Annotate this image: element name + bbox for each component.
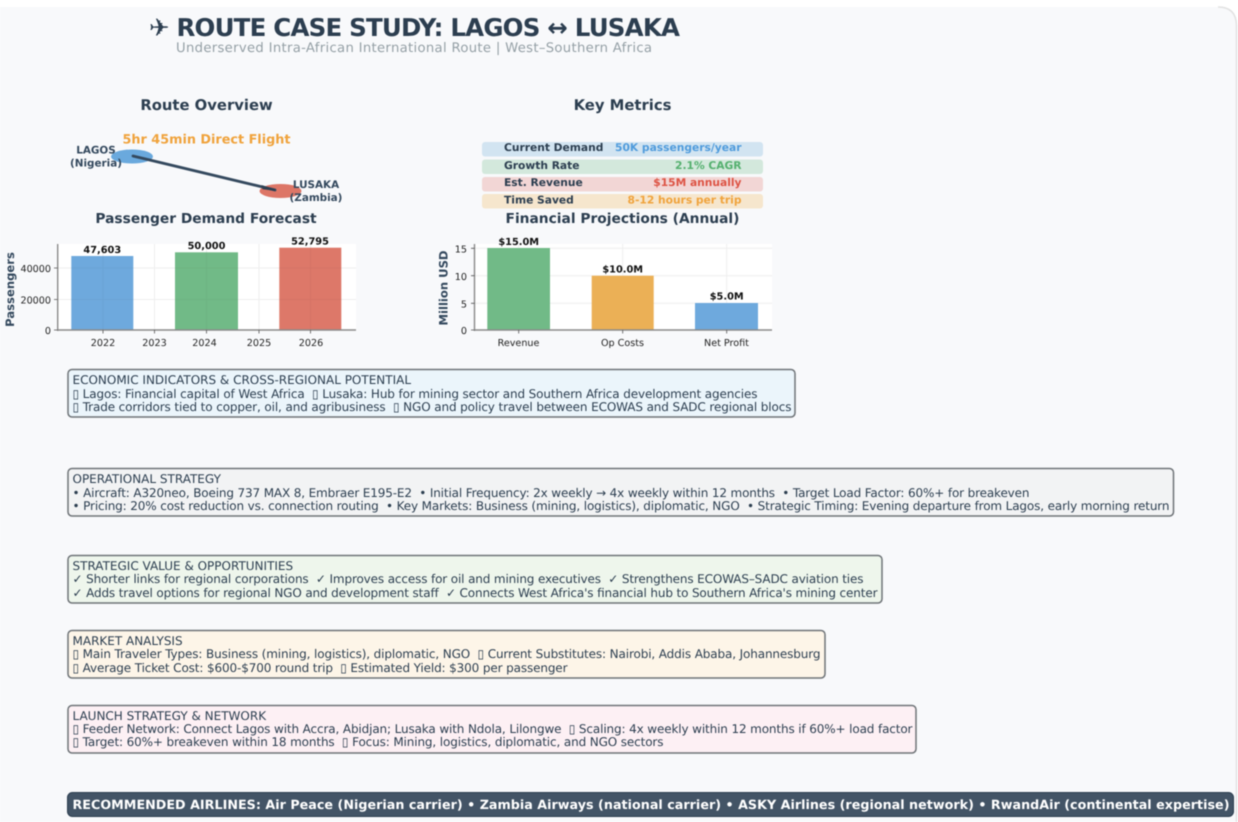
heading: passenger demand forecast: Passenger Demand Forecast (95, 211, 317, 227)
metric: time saved (482, 194, 763, 208)
axis tick labels: Net Profit (704, 338, 749, 349)
bar chart: financial projections: 5 (461, 300, 467, 310)
y axis label: Passengers (3, 252, 17, 327)
panel: operational strategy: • Pricing: 20% cost reduction vs. connection routing • Key Markets: Business (mining, logistics), diplomatic, NGO • Strategic Timing: Evening departure from Lagos, early morning return (72, 499, 1170, 513)
axis tick labels: 2023 (142, 338, 167, 349)
panel: economic indicators: ▯ Lagos: Financial capital of West Africa ▯ Lusaka: Hub for mining sector and Southern Africa development agencies (72, 387, 758, 401)
bar value labels: 47,603 (83, 245, 121, 256)
metric: current demand: Current Demand (504, 141, 603, 154)
Lusaka label: (Zambia) (290, 192, 342, 204)
heading: route overview: Route Overview (140, 97, 273, 114)
bar chart: financial projections: $10.0M (602, 264, 643, 276)
panel: operational strategy: • Aircraft: A320neo, Boeing 737 MAX 8, Embraer E195-E2 • Initial Frequency: 2x weekly → 4x weekly within 12 months • Target Load Factor: 60%+ for breakeven (72, 486, 1030, 500)
metric: growth rate: 2.1% CAGR (675, 159, 742, 172)
metric: time saved: 8-12 hours per trip (628, 194, 742, 206)
bar: 2024 (175, 252, 238, 330)
panel: economic indicators: ▯ Trade corridors tied to copper, oil, and agribusiness ▯ NGO and policy travel between ECOWAS and SADC regional blocs (72, 400, 792, 414)
banner: recommended airlines: RECOMMENDED AIRLINES: Air Peace (Nigerian carrier) • Zambia Airways (national carrier) • ASKY Airlines (regional network) • RwandAir (continental expertise) (72, 797, 1230, 812)
panel: operational strategy: OPERATIONAL STRATEGY (72, 472, 222, 486)
metric: growth rate: Growth Rate (504, 159, 580, 172)
Lagos marker (111, 150, 153, 164)
bar chart: financial projections: 0 (461, 326, 467, 337)
metric: current demand: 50K passengers/year (615, 141, 742, 154)
panel: market analysis: ▯ Main Traveler Types: Business (mining, logistics), diplomatic, NGO ▯ Current Substitutes: Nairobi, Addis Ababa, Johannesburg (72, 647, 820, 661)
Lagos label: LAGOS (76, 144, 116, 156)
bar chart: financial projections: 15 (455, 244, 467, 256)
key metrics list (482, 141, 763, 208)
panel: strategic value: STRATEGIC VALUE & OPPORTUNITIES (72, 559, 293, 573)
bar value labels: $15.0M (498, 237, 539, 248)
axis tick labels: Op Costs (601, 338, 644, 349)
panel: strategic value (68, 556, 882, 603)
bar chart: financial projections: $5.0M (710, 292, 744, 302)
panel: operational strategy (68, 468, 1174, 516)
bar chart: passenger demand: 52,795 (291, 236, 329, 248)
bar chart: passenger demand (3, 236, 356, 349)
panel: launch strategy: LAUNCH STRATEGY & NETWORK (72, 709, 267, 723)
axis tick labels: Revenue (498, 338, 539, 349)
bar chart: passenger demand: 40000 (20, 264, 51, 275)
panel: strategic value: ✓ Shorter links for regional corporations ✓ Improves access for oil and mining executives ✓ Strengthens ECOWAS–SADC aviation ties (72, 572, 864, 586)
panel: strategic value: ✓ Adds travel options for regional NGO and development staff ✓ Connects West Africa's financial hub to Southern Africa's mining center (72, 586, 878, 600)
metric: estimated revenue (482, 176, 763, 192)
bar chart: passenger demand: 0 (45, 326, 51, 337)
axis tick labels: 2022 (91, 338, 115, 349)
heading: financial projections: Financial Projections (Annual) (506, 211, 739, 227)
banner: recommended airlines (68, 792, 1234, 816)
metric: growth rate (482, 159, 763, 174)
metric: current demand (482, 141, 763, 156)
route line (133, 156, 275, 190)
Lusaka label: LUSAKA (293, 179, 339, 191)
route map (70, 132, 342, 204)
Lusaka marker (260, 184, 302, 198)
bar: net profit (695, 303, 758, 330)
axis tick labels: 2024 (192, 338, 217, 349)
metric: estimated revenue: Est. Revenue (504, 176, 583, 189)
metric: time saved: Time Saved (504, 194, 574, 206)
flight duration label: 5hr 45min Direct Flight (123, 132, 290, 148)
bar: 2026 (279, 248, 341, 330)
axis tick labels: 2026 (299, 338, 323, 349)
bar chart: financial projections (436, 237, 772, 349)
title: ✈ ROUTE CASE STUDY: LAGOS ↔ LUSAKA (149, 13, 680, 42)
bar: 2022 (71, 256, 133, 330)
y axis label: Million USD (436, 250, 450, 326)
panel: launch strategy: ▯ Target: 60%+ breakeven within 18 months ▯ Focus: Mining, logistics, diplomatic, and NGO sectors (72, 735, 664, 749)
Lagos label: (Nigeria) (70, 158, 122, 170)
heading: key metrics: Key Metrics (574, 97, 672, 114)
axis tick labels: 2025 (247, 338, 271, 349)
panel: market analysis: MARKET ANALYSIS (72, 634, 183, 648)
subtitle: Underserved Intra-African International Route | West–Southern Africa (176, 41, 652, 56)
panel: market analysis (68, 630, 825, 678)
panel: launch strategy: ▯ Feeder Network: Connect Lagos with Accra, Abidjan; Lusaka with Ndola, Lilongwe ▯ Scaling: 4x weekly within 12 months if 60%+ load factor (72, 722, 913, 736)
panel: economic indicators (68, 370, 795, 417)
panel: market analysis: ▯ Average Ticket Cost: $600-$700 round trip ▯ Estimated Yield: $300 per passenger (72, 661, 568, 675)
panel: economic indicators: ECONOMIC INDICATORS & CROSS-REGIONAL POTENTIAL (72, 373, 411, 387)
bar chart: financial projections: 10 (455, 272, 467, 283)
metric: estimated revenue: $15M annually (653, 176, 742, 189)
panel: launch strategy (68, 706, 916, 753)
bar chart: passenger demand: 20000 (20, 296, 51, 306)
bar chart: passenger demand: 50,000 (188, 241, 226, 252)
bar: op costs (592, 276, 654, 330)
bar: revenue (487, 248, 550, 330)
